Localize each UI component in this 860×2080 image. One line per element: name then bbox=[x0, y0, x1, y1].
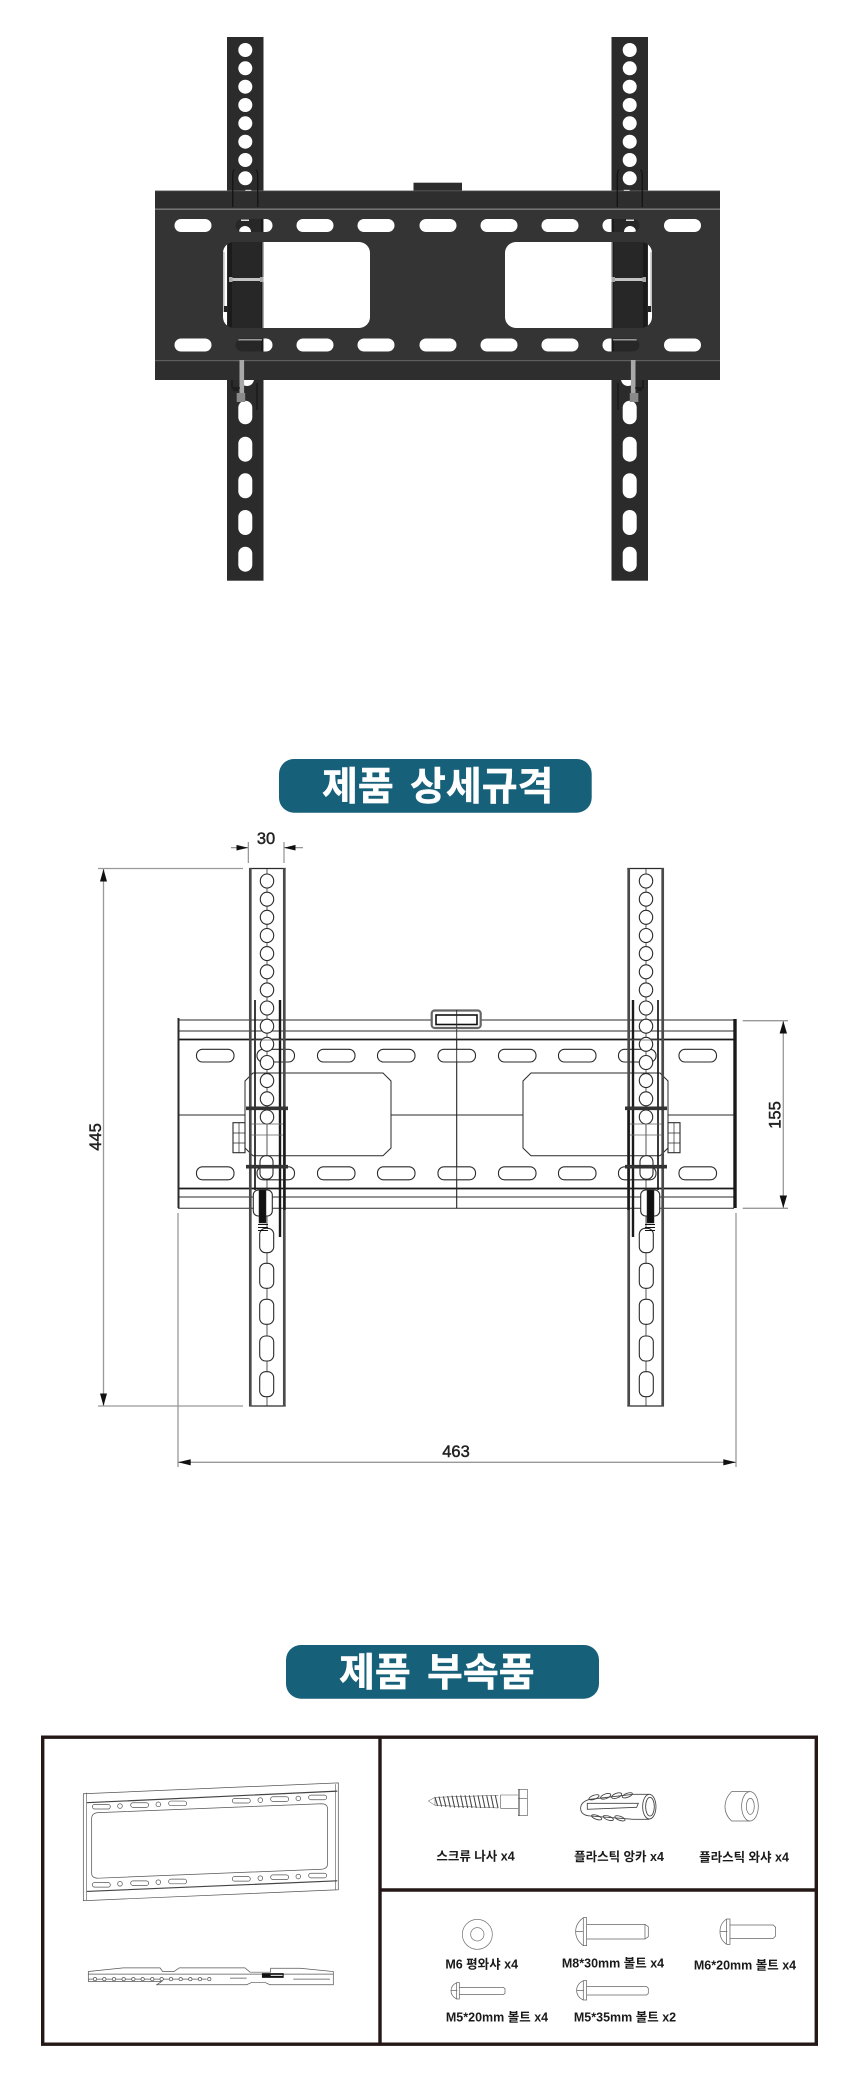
dimension: 30: 30 bbox=[257, 830, 275, 848]
top tab bbox=[432, 1010, 481, 1028]
panel: accessories table bbox=[43, 1737, 816, 2044]
heading: product accessories badge: 제품 bbox=[339, 1652, 411, 1695]
dimension: 30 bbox=[231, 830, 303, 863]
heading: product specifications badge: 상세규격 bbox=[410, 766, 554, 809]
label: plastic spacer: 플라스틱 와샤 x4 bbox=[699, 1850, 789, 1864]
chart: dimension line drawing bbox=[87, 830, 788, 1467]
dimension: 155: 155 bbox=[766, 1101, 784, 1129]
label: M5 35mm bolt: M5*35mm 볼트 x2 bbox=[574, 2010, 676, 2024]
icon: M8 bolt bbox=[576, 1918, 648, 1946]
dimension: 463 bbox=[178, 1213, 736, 1467]
icon: wood screw bbox=[428, 1789, 527, 1816]
left rail (back) bbox=[223, 37, 264, 581]
panel: product photo of black tilting TV wall bracket bbox=[155, 37, 720, 581]
icon: plastic anchor bbox=[581, 1792, 656, 1822]
label: M6 bolt: M6*20mm 볼트 x4 bbox=[694, 1958, 796, 1972]
label: screw: 스크류 나사 x4 bbox=[436, 1850, 515, 1864]
label: M6 washer: M6 평와샤 x4 bbox=[445, 1956, 518, 1972]
label: plastic anchor: 플라스틱 앙카 x4 bbox=[574, 1849, 664, 1864]
dimension: 445 bbox=[87, 868, 243, 1406]
label: M8 bolt: M8*30mm 볼트 x4 bbox=[562, 1956, 664, 1970]
top centre tab bbox=[414, 183, 462, 192]
heading: product specifications badge bbox=[279, 759, 592, 813]
horizontal wall plate with slots and windows bbox=[155, 190, 720, 380]
right rail (back) bbox=[612, 37, 652, 581]
icon: M5 20mm bolt bbox=[451, 1983, 505, 1999]
right upright rail bbox=[625, 868, 680, 1406]
left rail (front hardware) bbox=[232, 170, 258, 410]
heading: product accessories badge: 부속품 bbox=[427, 1652, 535, 1695]
plate outline bbox=[178, 1010, 735, 1208]
heading: product accessories badge bbox=[286, 1645, 599, 1699]
right rail (front hardware) bbox=[617, 170, 643, 410]
table frame and dividers bbox=[43, 1737, 816, 2044]
drawing: wall plate perspective view bbox=[83, 1783, 338, 1901]
icon: M5 35mm bolt bbox=[577, 1981, 648, 2000]
slots rows bbox=[196, 1049, 716, 1180]
icon: plastic spacer bbox=[725, 1792, 758, 1821]
heading: product specifications badge: 제품 bbox=[322, 766, 394, 809]
left upright rail bbox=[233, 868, 288, 1406]
label: M5 20mm bolt: M5*20mm 볼트 x4 bbox=[446, 2010, 548, 2024]
dimension: 463: 463 bbox=[442, 1443, 470, 1461]
dimension: 445: 445 bbox=[87, 1123, 105, 1151]
icon: M6 20mm bolt bbox=[720, 1919, 776, 1944]
window cutouts bbox=[245, 1073, 391, 1156]
icon: flat washer bbox=[462, 1919, 492, 1949]
dimension: 155 bbox=[743, 1021, 788, 1208]
drawing: wall plate side view bbox=[88, 1968, 333, 1985]
